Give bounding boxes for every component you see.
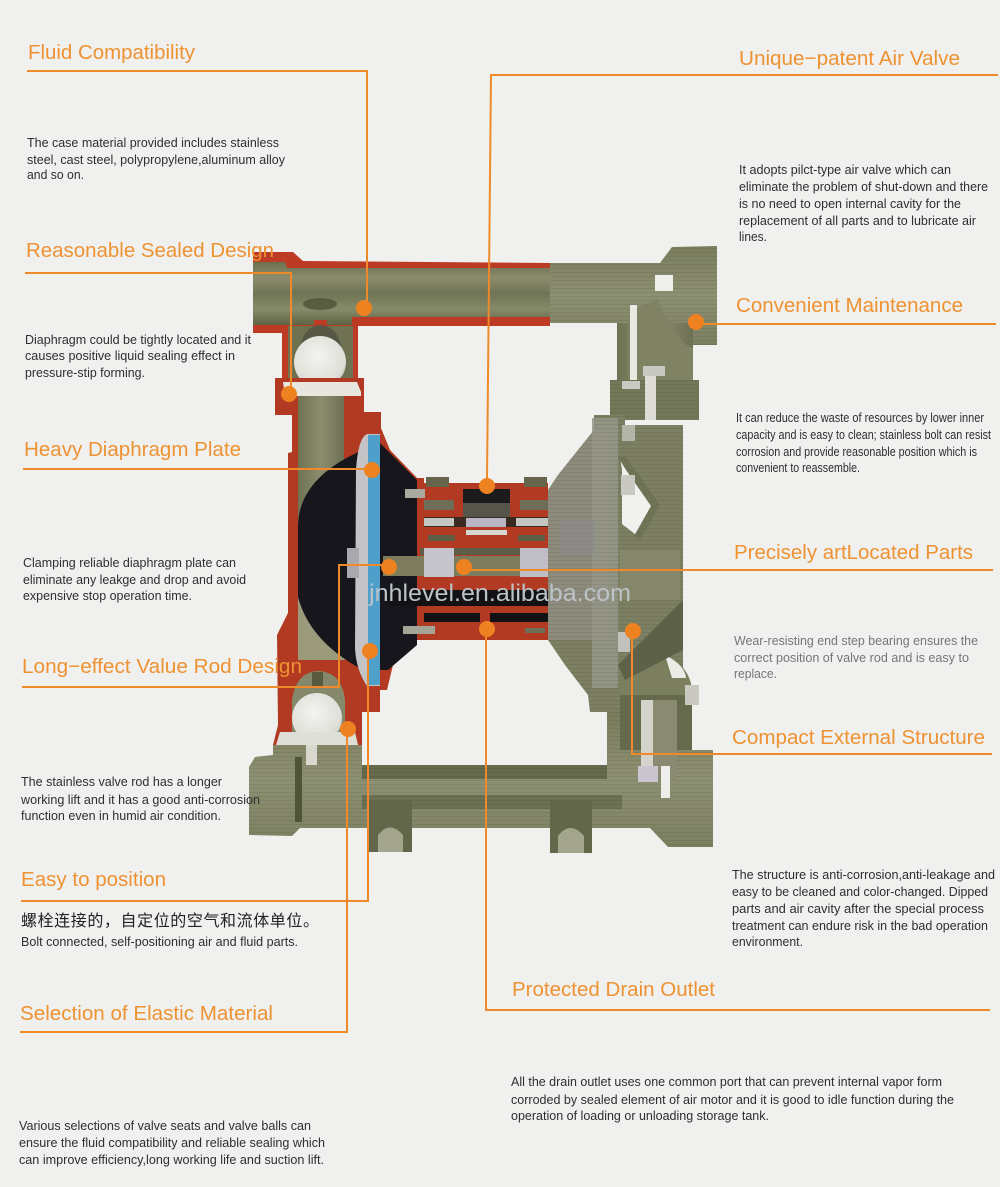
leader line: elastic material [20,721,356,1032]
text: easy to position: Bolt connected, self-positioning air and fluid parts. [21,935,298,949]
leader line: sealed design [25,273,297,402]
left upper valve chamber [288,298,353,384]
text: valve rod: The stainless valve rod has a longer [21,775,222,789]
black diaphragm chamber [298,443,417,670]
heading: compact external structure: Compact External Structure [732,726,985,749]
text: external structure: environment. [732,935,803,949]
text: air valve: is no need to open internal cavity for the [739,197,961,211]
leader line: maintenance [688,314,996,330]
mounting feet [369,800,592,853]
watermark: jnhlevel.en.alibaba.com [368,580,631,607]
text: external structure: parts and air cavity after the special process [732,902,984,916]
text: air valve: eliminate the problem of shut-down and there [739,180,988,194]
centre red section [424,483,548,640]
leader line: drain outlet [479,621,990,1010]
valve seat top [283,382,361,396]
heading: unique-patent air valve: Unique−patent Air Valve [739,47,960,70]
right upper column and flange [610,275,699,420]
text: drain outlet: corroded by sealed element of air motor and it is good to idle function during the [511,1093,954,1107]
text: elastic material: can improve efficiency,long working life and suction lift. [19,1153,324,1167]
heading: precisely located parts: Precisely artLocated Parts [734,541,973,564]
text: sealed design: causes positive liquid sealing effect in [25,349,235,363]
heading: long-effect value rod design: Long−effect Value Rod Design [22,655,302,678]
text: located parts: Wear-resisting end step bearing ensures the [734,634,978,648]
heading: selection of elastic material: Selection of Elastic Material [20,1002,273,1025]
text: maintenance: convenient to reassemble. [736,461,860,475]
text: fluid compatibility: steel, cast steel, polypropylene,aluminum alloy [27,153,286,167]
top outlet pipe [253,246,717,378]
leader line: valve rod [22,559,397,687]
heading: fluid compatibility: Fluid Compatibility [28,41,196,64]
text: elastic material [19,1119,325,1167]
right lower column [618,600,699,798]
text: maintenance [736,411,991,475]
text: air valve: It adopts pilct-type air valve which can [739,163,951,177]
text: fluid compatibility [27,136,286,182]
text: easy to position [21,912,319,949]
text: air valve: replacement of all parts and to lubricate air [739,214,976,228]
text: external structure [732,868,995,949]
right diaphragm housing [548,415,690,712]
text: sealed design: Diaphragm could be tightly located and it [25,333,252,347]
heading: protected drain outlet: Protected Drain Outlet [512,978,715,1001]
pump cross-section illustration [249,246,717,853]
leader line: easy to position [21,643,378,901]
text: drain outlet: operation of loading or unloading storage tank. [511,1109,769,1123]
left column interior [298,396,344,536]
left red housing [273,378,424,765]
text: sealed design [25,333,252,380]
text: located parts: replace. [734,667,777,681]
text: diaphragm plate: eliminate any leakge and drop and avoid [23,573,246,587]
leader line: fluid compatibility [27,71,372,316]
leader line: external structure [625,623,992,754]
heading: convenient maintenance: Convenient Maintenance [736,294,963,317]
text: drain outlet [511,1075,954,1123]
upper valve ball [294,336,346,388]
text: located parts [734,634,978,681]
text: valve rod: function even in humid air condition. [21,809,221,823]
text: diaphragm plate: expensive stop operation time. [23,589,192,603]
text: drain outlet: All the drain outlet uses one common port that can prevent internal vapor form [511,1075,942,1089]
heading: reasonable sealed design: Reasonable Sealed Design [26,239,274,262]
text: located parts: correct position of valve rod and is easy to [734,651,969,665]
lower valve seat [276,732,358,745]
text: air valve: lines. [739,230,767,244]
leader line: located parts [456,559,993,575]
text: fluid compatibility: and so on. [27,168,84,182]
text: sealed design: pressure-stip forming. [25,366,145,380]
text: fluid compatibility: The case material provided includes stainless [27,136,279,150]
text: external structure: The structure is anti-corrosion,anti-leakage and [732,868,995,882]
lower bottom pipe [249,712,713,847]
heading: easy to position: Easy to position [21,868,166,891]
text: air valve [739,163,988,244]
text: diaphragm plate: Clamping reliable diaphragm plate can [23,556,236,570]
lower chamber [292,590,345,735]
diaphragm plate [347,434,380,686]
text: easy to position: 螺栓连接的，自定位的空气和流体单位。 [21,912,319,930]
text: external structure: easy to be cleaned and color-changed. Dipped [732,885,988,899]
text: valve rod [20,775,260,823]
lower valve ball [292,693,342,743]
leader line: air valve [479,75,998,494]
air motor detail [383,477,550,634]
text: elastic material: ensure the fluid compatibility and reliable sealing which [19,1136,325,1150]
text: elastic material: Various selections of valve seats and valve balls can [19,1119,311,1133]
heading: heavy diaphragm plate: Heavy Diaphragm Plate [24,438,241,461]
text: valve rod: working lift and it has a good anti-corrosion [20,793,260,807]
leader line: diaphragm plate [23,462,380,478]
text: diaphragm plate [23,556,246,603]
text: external structure: treatment can endure risk in the bad operation [732,919,988,933]
